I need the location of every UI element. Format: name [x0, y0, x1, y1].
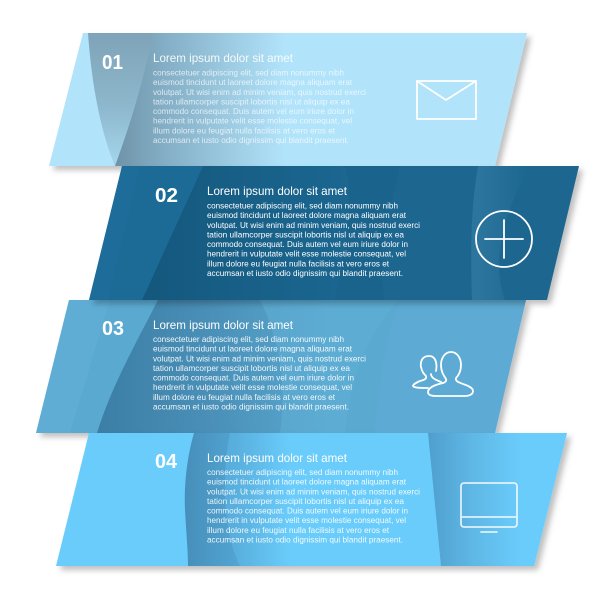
body text 3: commodo consequat. Duis autem vel eum iriure dolor in [153, 373, 354, 383]
body text 2: tation ullamcorper suscipit lobortis nisl ut aliquip ex ea [207, 229, 404, 239]
body text 4: volutpat. Ut wisi enim ad minim veniam, quis nostrud exerci [207, 486, 420, 496]
icon: envelope [417, 81, 476, 119]
body text 4: consectetuer adipiscing elit, sed diam nonummy nibh [207, 467, 398, 477]
body text 4: euismod tincidunt ut laoreet dolore magna aliquam erat [207, 477, 407, 487]
heading 2: Lorem ipsum dolor sit amet [207, 184, 348, 198]
panel 2 [89, 166, 579, 300]
body text 3 [153, 334, 366, 412]
number 01: 01 [102, 52, 123, 74]
body text 4: hendrerit in vulputate velit esse molestie consequat, vel [207, 515, 406, 525]
icon: monitor [461, 483, 517, 532]
body text 3: accumsan et iusto odio dignissim qui blandit praesent. [153, 402, 349, 412]
body text 1 [153, 68, 366, 145]
body text 3: tation ullamcorper suscipit lobortis nisl ut aliquip ex ea [153, 363, 350, 373]
body text 2: accumsan et iusto odio dignissim qui blandit praesent. [207, 268, 403, 278]
heading 3: Lorem ipsum dolor sit amet [153, 318, 294, 332]
icon: people [413, 352, 473, 396]
body text 4 [207, 467, 420, 544]
body text 2: commodo consequat. Duis autem vel eum iriure dolor in [207, 239, 408, 249]
heading 1: Lorem ipsum dolor sit amet [153, 51, 294, 65]
heading 4: Lorem ipsum dolor sit amet [207, 451, 348, 465]
body text 4: tation ullamcorper suscipit lobortis nisl ut aliquip ex ea [207, 496, 404, 506]
number 04: 04 [155, 451, 178, 473]
body text 3: volutpat. Ut wisi enim ad minim veniam, quis nostrud exerci [153, 353, 366, 363]
body text 3: euismod tincidunt ut laoreet dolore magna aliquam erat [153, 344, 353, 354]
body text 2: illum dolore eu feugiat nulla facilisis at vero eros et [207, 258, 390, 268]
body text 1: commodo consequat. Duis autem vel eum iriure dolor in [153, 106, 354, 116]
body text 4: accumsan et iusto odio dignissim qui blandit praesent. [207, 534, 403, 544]
icon: plus in circle [476, 211, 532, 267]
body text 1: tation ullamcorper suscipit lobortis nisl ut aliquip ex ea [153, 96, 350, 106]
body text 2: volutpat. Ut wisi enim ad minim veniam, quis nostrud exerci [207, 220, 420, 230]
body text 3: illum dolore eu feugiat nulla facilisis at vero eros et [153, 392, 336, 402]
body text 4: commodo consequat. Duis autem vel eum iriure dolor in [207, 506, 408, 516]
panel 1 [49, 33, 527, 166]
body text 3: consectetuer adipiscing elit, sed diam nonummy nibh [153, 334, 344, 344]
body text 3: hendrerit in vulputate velit esse molestie consequat, vel [153, 382, 352, 392]
body text 1: consectetuer adipiscing elit, sed diam nonummy nibh [153, 68, 344, 78]
body text 2: hendrerit in vulputate velit esse molestie consequat, vel [207, 249, 406, 259]
body text 4: illum dolore eu feugiat nulla facilisis at vero eros et [207, 525, 390, 535]
body text 1: hendrerit in vulputate velit esse molestie consequat, vel [153, 116, 352, 126]
panel 3 [36, 300, 526, 433]
body text 2: euismod tincidunt ut laoreet dolore magna aliquam erat [207, 210, 407, 220]
body text 1: volutpat. Ut wisi enim ad minim veniam, quis nostrud exerci [153, 87, 366, 97]
body text 1: accumsan et iusto odio dignissim qui blandit praesent. [153, 135, 349, 145]
number 03: 03 [102, 318, 124, 340]
body text 1: euismod tincidunt ut laoreet dolore magna aliquam erat [153, 77, 353, 87]
body text 1: illum dolore eu feugiat nulla facilisis at vero eros et [153, 125, 336, 135]
body text 2: consectetuer adipiscing elit, sed diam nonummy nibh [207, 200, 398, 210]
number 02: 02 [155, 185, 178, 207]
body text 2 [207, 200, 420, 278]
panel 4 [56, 433, 567, 566]
